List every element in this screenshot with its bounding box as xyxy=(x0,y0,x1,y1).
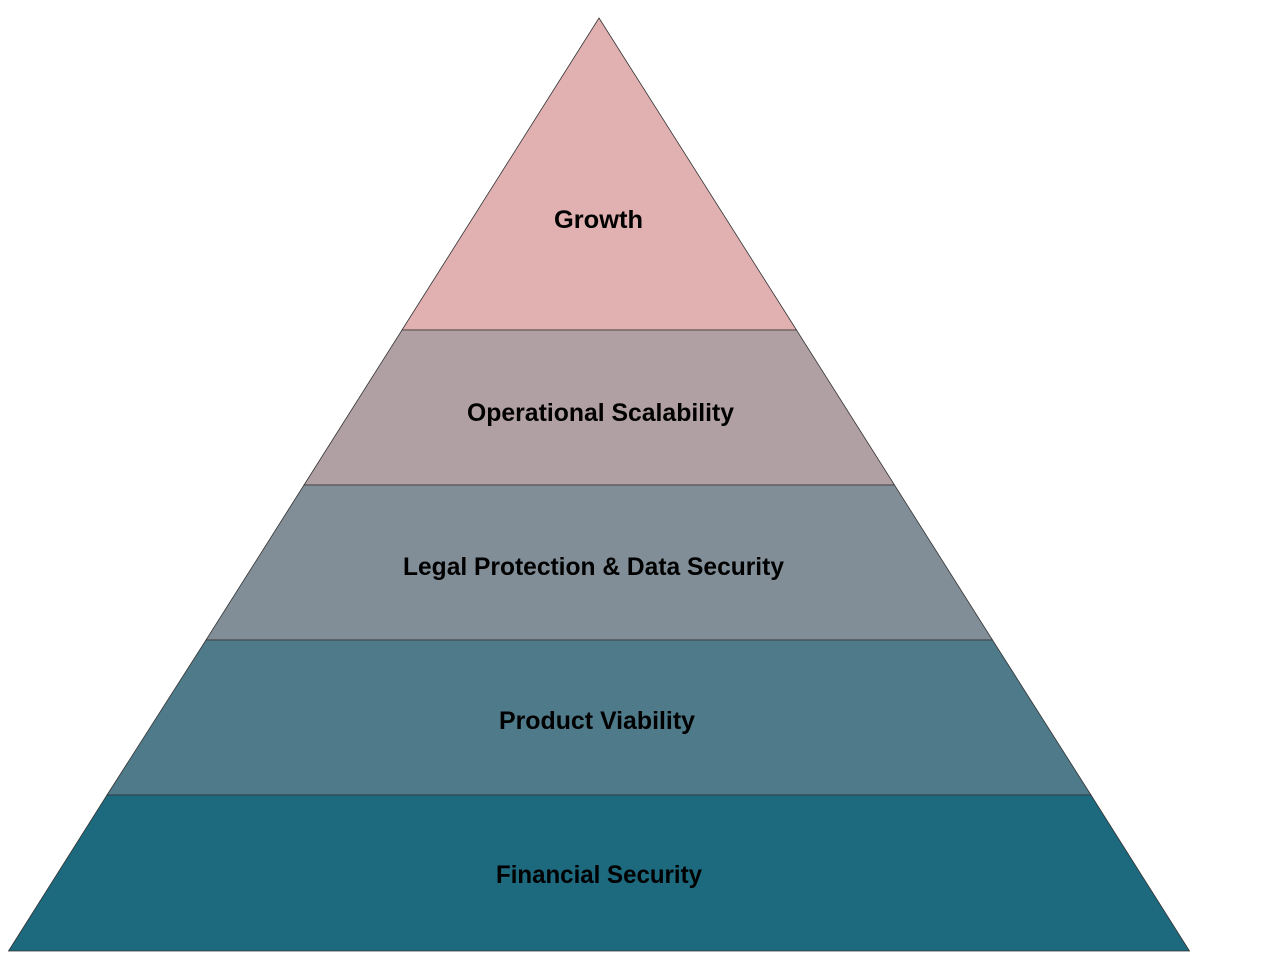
pyramid tier: Financial Security xyxy=(8,795,1190,951)
pyramid tier: Operational Scalability xyxy=(304,330,894,485)
pyramid tier: Legal Protection & Data Security xyxy=(206,485,992,640)
label: Product Viability: Product Viability xyxy=(499,707,695,735)
label: Operational Scalability: Operational Scalability xyxy=(467,399,734,427)
label: Financial Security: Financial Security xyxy=(496,861,702,889)
label: Growth: Growth xyxy=(554,206,643,234)
pyramid tier: Product Viability xyxy=(107,640,1091,795)
pyramid tier: Growth xyxy=(402,18,796,330)
label: Legal Protection & Data Security: Legal Protection & Data Security xyxy=(403,553,784,581)
